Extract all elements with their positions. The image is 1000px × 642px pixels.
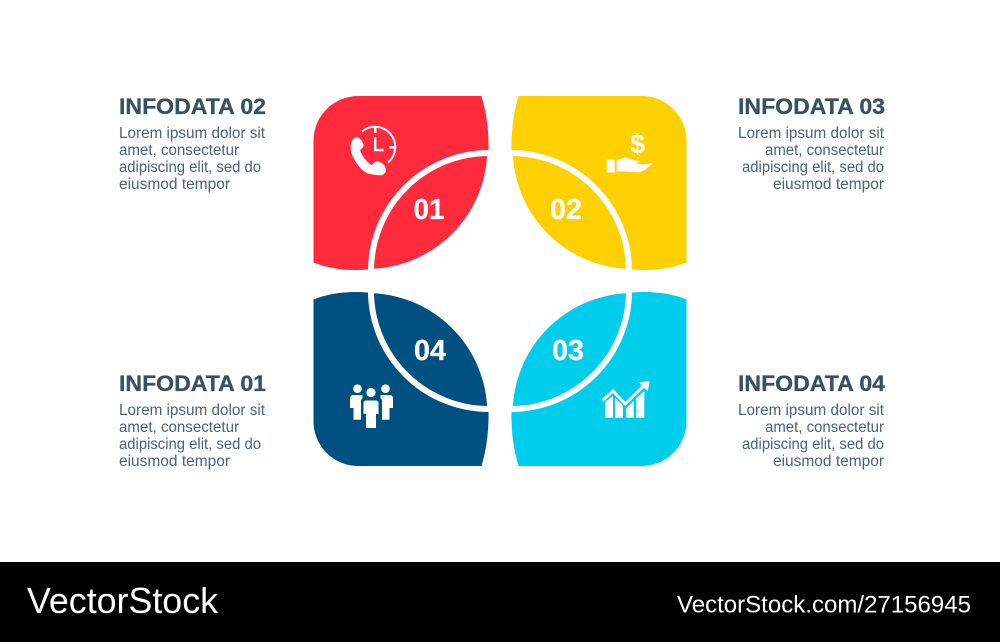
text block: INFODATA 02: eiusmod tempor (119, 176, 230, 193)
footer logo text: VectorStock (27, 580, 219, 621)
panel: segment 03 cyan (510, 291, 686, 466)
icon: growth chart (602, 381, 650, 418)
icon: hand with dollar: $ (630, 129, 645, 159)
text block: INFODATA 01: INFODATA 01 (119, 371, 266, 396)
text block: INFODATA 03: eiusmod tempor (773, 176, 884, 193)
text block: INFODATA 04: eiusmod tempor (773, 453, 884, 470)
text block: INFODATA 01: adipiscing elit, sed do (119, 436, 261, 453)
footer image id: VectorStock.com/27156945 (677, 592, 971, 618)
navy petal shape (314, 292, 489, 466)
text block: INFODATA 01: eiusmod tempor (119, 453, 230, 470)
text block: INFODATA 01 (119, 371, 266, 470)
icon: group of people (350, 384, 393, 428)
number 01: 01 (414, 194, 444, 226)
text block: INFODATA 02: Lorem ipsum dolor sit (119, 125, 266, 142)
text block: INFODATA 04 (738, 371, 885, 470)
text block: INFODATA 02: INFODATA 02 (119, 94, 266, 119)
text block: INFODATA 04: Lorem ipsum dolor sit (738, 402, 885, 419)
text block: INFODATA 03: adipiscing elit, sed do (742, 159, 884, 176)
yellow petal shape (511, 96, 686, 270)
text block: INFODATA 04: adipiscing elit, sed do (742, 436, 884, 453)
footer bar (0, 562, 1000, 642)
text block: INFODATA 04: INFODATA 04 (738, 371, 885, 396)
panel: segment 04 navy (314, 291, 490, 466)
text block: INFODATA 04: amet, consectetur (765, 419, 884, 436)
text block: INFODATA 03: INFODATA 03 (738, 94, 885, 119)
text block: INFODATA 03: amet, consectetur (765, 142, 884, 159)
cyan petal shape (511, 292, 686, 466)
text block: INFODATA 02: amet, consectetur (119, 142, 239, 159)
red petal shape (314, 96, 489, 270)
panel: segment 02 yellow (510, 96, 686, 271)
text block: INFODATA 01: amet, consectetur (119, 419, 239, 436)
text block: INFODATA 02: adipiscing elit, sed do (119, 159, 261, 176)
text block: INFODATA 03: Lorem ipsum dolor sit (738, 125, 885, 142)
panel: segment 01 red (314, 96, 490, 271)
icon: hand with dollar (607, 129, 653, 172)
number 02: 02 (550, 194, 582, 226)
icon: phone and clock (351, 127, 395, 175)
text block: INFODATA 03 (738, 94, 885, 193)
number 03: 03 (552, 335, 584, 367)
text block: INFODATA 01: Lorem ipsum dolor sit (119, 402, 266, 419)
text block: INFODATA 02 (119, 94, 266, 193)
number 04: 04 (414, 335, 446, 367)
